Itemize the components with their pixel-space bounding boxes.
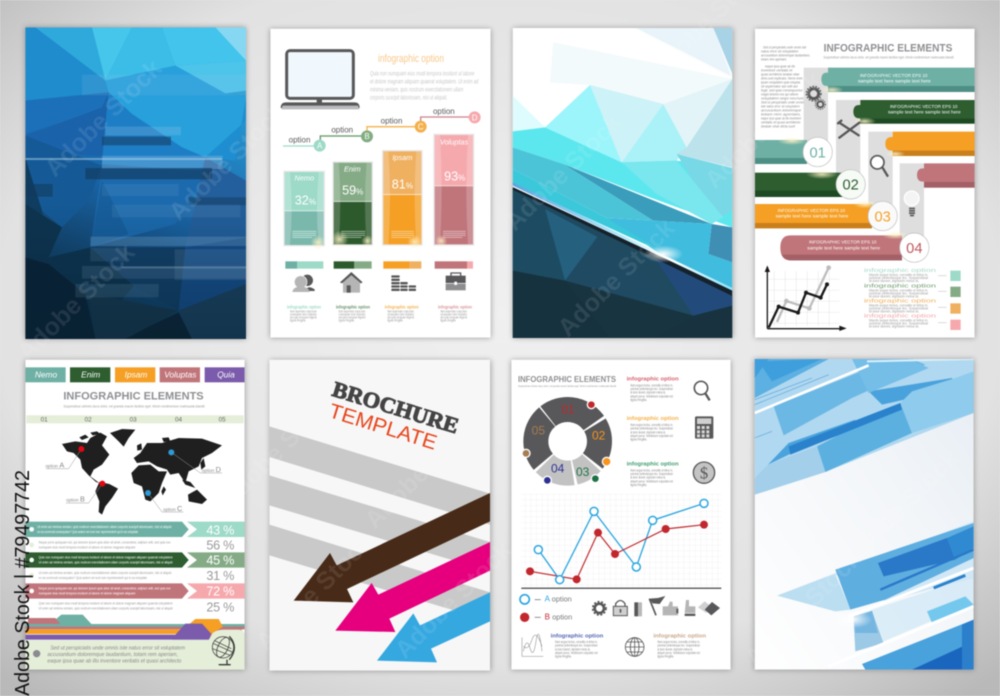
watermark: Adobe Stock: Adobe Stock: [359, 406, 487, 534]
row: 72%: [25, 583, 245, 599]
text block: blue option: ligula fringilla.: [555, 655, 572, 659]
text block: brown option: Nam augue lectus, convallis ut tellus in,: [657, 640, 700, 644]
watermark: Adobe Stock: Adobe Stock: [12, 238, 140, 366]
icon: people: [292, 275, 315, 292]
text block: option red: Nam augue lectus, convallis ut tellus in,: [630, 383, 673, 387]
timeline: options A to D: D: [472, 113, 478, 122]
icon: handshake: [698, 601, 720, 615]
timeline: options A to D: option: [433, 107, 455, 116]
text block: option captions: Nam aspernatur culpa iusto: [290, 310, 317, 314]
row: 31%: Ut enim ad minima veniam, quis nostrum exercitationem ullam corporis suscipit laboriosam, nisi ut aliquid: [39, 571, 171, 575]
coloured footer waves: [25, 615, 245, 641]
text block: left column: natus error sit voluptatem: [761, 50, 799, 54]
step badge 02: 02: [843, 178, 859, 194]
icon: padlock: [613, 600, 627, 616]
ribbon: teal top: sample text here sample text here: [858, 79, 931, 85]
ribbon: teal left: [755, 140, 807, 164]
option pins on map: option C: [163, 504, 183, 513]
bar: Nemo 32%: 32%: [295, 193, 316, 207]
text block: intro: et dolore magnam aliquam quaerat voluptatem. Ut enim ad: [370, 80, 479, 86]
text block: blue option: pulvinar pellentesque leo. Suspendisse: [555, 644, 598, 648]
text block: blue option: aliquet purus. Vestibulum vulputate est: [555, 651, 598, 655]
step badge 02: [836, 170, 865, 199]
footer text panel: [25, 630, 245, 670]
row: 31%: ex ea commodi consequatur? Quis autem vel eum iure reprehenderit qui in ea voluptate: [39, 576, 147, 580]
icon: laptop: [281, 51, 360, 109]
numbered band: 04: [175, 417, 183, 424]
text block: left column: Sed ut perspiciatis unde omnis: [761, 100, 805, 104]
bar: Voluptas 93%: 93%: [444, 170, 465, 184]
bar: Enim 59%: [331, 161, 373, 248]
option pins on map: option B: [66, 495, 85, 504]
row: 25%: 25 %: [206, 601, 234, 615]
text block: option captions: Nam aspernatur culpa iusto: [339, 310, 365, 314]
text block: option labels: infographic option: [336, 304, 370, 309]
bar: Nemo 32%: [283, 171, 325, 250]
option pins on map: option A: [45, 461, 64, 470]
text block: left column: accusantium doloremque laudantium,: [761, 54, 810, 58]
text block: option captions: ligula fringilla: [440, 319, 456, 323]
bar: Ipsam 81%: 81%: [392, 178, 413, 192]
text block: option captions: consequatur dolor explicabo: [339, 313, 365, 317]
ribbon: red left: [780, 235, 902, 260]
row: 31%: 31 %: [206, 569, 234, 583]
numbered band: 01: [41, 417, 48, 424]
step badge 01: [803, 137, 832, 167]
text block: intro: minima veniam, quis nostrum exercitationem ullam: [370, 88, 463, 94]
text block: option orange: Nam augue lectus, convallis ut tellus in,: [630, 423, 673, 427]
text block: option captions: sed quia numquam eligendi: [339, 316, 366, 320]
heading: infographic elements: INFOGRAPHIC ELEMENTS: [824, 42, 952, 54]
text block: option green: at dolor laoreet, dignissim metus at,: [630, 476, 666, 480]
text block: left column: totam rem aperiam,: [761, 58, 787, 62]
donut chart: 01: [561, 402, 575, 416]
text block: option captions: consequatur dolor explicabo: [440, 313, 467, 317]
donut chart: 04: [551, 461, 565, 475]
text block: option orange: aliquet purus. Vestibulum vulputate est: [630, 434, 673, 438]
text block: option captions: ligula fringilla: [387, 319, 403, 323]
step badge 01: 01: [810, 145, 826, 161]
panel: light blue geometric cover: [755, 359, 974, 670]
subtitle: Suspendisse ultricies lacus dolor, vel gravida mauris facilisis eget. Morbi condimentum malesuada blandit.: [518, 384, 617, 388]
ribbon glows: [777, 86, 909, 239]
legend: infographic options: pulvinar pellentesque leo. Suspendisse: [869, 276, 929, 280]
bar: Ipsam 81%: Ipsam: [392, 153, 412, 162]
text block: left column: totam rem aperiam,: [761, 112, 801, 116]
text block: option labels: [287, 304, 472, 309]
panel: dark blue polygon cover: [25, 27, 246, 339]
text block: option captions: sed quia numquam eligendi: [387, 316, 414, 320]
legend: infographic options: at dolor laoreet, dignissim metus at,: [869, 310, 919, 314]
text block: option orange: pulvinar pellentesque leo. Suspendisse: [630, 427, 673, 431]
text block: option green: ligula fringilla.: [630, 483, 647, 487]
row: 25%: Ut enim ad minima veniam, quis nostrum exercitationem ullam corporis suscipit laboriosam, nisi ut aliquid: [39, 607, 173, 611]
tabs row: Enim: [81, 370, 100, 380]
row: 72%: Neque porro quisquam est, qui dolorem ipsum quia dolor sit amet, consectetur, adipisci velit, sed quia non: [39, 587, 171, 591]
ribbon: orange left: INFOGRAPHIC VECTOR EPS 10: [778, 208, 846, 213]
row: 31%: [29, 569, 234, 583]
ribbon: orange left: sample text here sample text here: [776, 214, 849, 220]
text block: left column: Sed ut perspiciatis unde omnis iste: [763, 46, 807, 50]
text block: option labels: infographic option: [287, 304, 321, 309]
text block: option green: Nam augue lectus, convallis ut tellus in,: [630, 468, 673, 472]
text block: intro: corporis suscipit laboriosam, nisi ut aliquid.: [370, 96, 447, 102]
icon: card: [634, 602, 642, 616]
text block: left column: sit aspernatur aut odit aut: [761, 84, 798, 88]
text block: left column: magni dolores eos qui ratione: [761, 92, 799, 96]
grey connector strips: [804, 68, 924, 238]
text block: blue option: [551, 634, 604, 659]
row: 25%: Quis non numquam eius modi tempora incidunt ut labore et dolore magnam aliquam quaerat voluptatem: [39, 602, 173, 606]
donut chart: 02: [592, 429, 606, 443]
icon: magnifier: [871, 156, 888, 177]
stock id vertical text: Adobe Stock | #79497742: [12, 470, 34, 696]
bar: Voluptas 93%: Voluptas: [440, 138, 468, 147]
icon: light bulb: [904, 191, 919, 216]
text block: brown option: ligula fringilla.: [657, 655, 674, 659]
world map: [62, 429, 222, 515]
legend: infographic options: pulvinar pellentesque leo. Suspendisse: [869, 291, 929, 295]
bar: Ipsam 81%: [382, 150, 423, 249]
watermark: Adobe Stock: Adobe Stock: [39, 54, 167, 182]
icon: axe: [649, 596, 665, 615]
legend: infographic options: pulvinar pellentesque leo. Suspendisse: [869, 322, 929, 326]
legend: infographic options: at dolor laoreet, dignissim metus at,: [869, 279, 919, 283]
heading: infographic elements: INFOGRAPHIC ELEMENTS: [518, 374, 616, 384]
row: 56%: 56 %: [206, 539, 234, 553]
text block: left column: quasi architecto beatae vitae: [761, 72, 800, 76]
donut chart: 05: [532, 423, 545, 437]
legend: infographic options: Mauris augue lectus, convallis ut tellus in,: [869, 319, 928, 323]
grey stripes: [269, 426, 490, 618]
arrow: blue: [377, 592, 490, 662]
title: template: TEMPLATE: [326, 399, 440, 455]
watermark: Adobe Stock: Adobe Stock: [163, 98, 291, 226]
timeline: options A to D: B: [364, 132, 370, 141]
step badge 03: 03: [875, 209, 891, 225]
legend: infographic options: [864, 268, 961, 330]
text block: brown option: pulvinar pellentesque leo. Suspendisse: [657, 644, 700, 648]
icon: thumbs up: [663, 601, 678, 615]
step badge 04: 04: [906, 241, 922, 257]
icon: gears: [806, 86, 825, 109]
text block: left column: beatae vitae dicta sunt: [761, 124, 795, 128]
watermark: Adobe Stock: Adobe Stock: [214, 386, 342, 514]
icon: globe: [625, 638, 644, 656]
text block: left column: [761, 46, 810, 128]
line chart: [521, 494, 721, 589]
panel: brochure template with arrows: [269, 360, 490, 671]
watermark: Adobe Stock: Adobe Stock: [250, 528, 378, 656]
row: 56%: numquam eius modi tempora incidunt ut labore et dolore magnam aliquam: [39, 545, 136, 549]
chart legend: B option: [545, 612, 572, 621]
timeline: options A to D: option: [331, 126, 353, 135]
text block: option captions: [290, 310, 467, 323]
text block: option red: pulvinar pellentesque leo. Suspendisse: [630, 387, 673, 391]
row: 43%: 43 %: [206, 523, 234, 537]
text block: option captions: Nam aspernatur culpa iusto: [387, 310, 414, 314]
icon: gear: [593, 602, 606, 615]
timeline: options A to D: [283, 107, 481, 152]
text block: brown option: [653, 634, 707, 659]
legend: infographic options: infographic option: [864, 283, 936, 289]
donut chart: [522, 396, 613, 486]
tabs row: Ipsam: [125, 370, 147, 380]
subtitle: Suspendisse ultricies lacus dolor, vel gravida mauris facilisis eget. Morbi condimentum malesuada blandit.: [823, 56, 954, 60]
donut chart: 03: [576, 465, 590, 479]
legend: infographic options: at dolor laoreet, dignissim metus at,: [869, 325, 919, 329]
text block: left column: iste natus error sit voluptatem: [761, 104, 800, 108]
text block: left column: accusantium doloremque: [761, 108, 801, 112]
text block: option orange: infographic option: [627, 416, 679, 422]
ribbon: orange top: [885, 132, 975, 156]
icon: small chart: [522, 634, 543, 656]
ribbon: red left: INFOGRAPHIC VECTOR EPS 10: [809, 240, 877, 245]
legend: infographic options: pulvinar pellentesque leo. Suspendisse: [869, 307, 929, 311]
watermark: Adobe Stock: Adobe Stock: [836, 444, 964, 572]
text block: option captions: Nam aspernatur culpa iusto: [440, 310, 467, 314]
numbered band: 05: [219, 417, 226, 424]
row: 45%: 45 %: [206, 554, 234, 568]
legend: infographic options: Mauris augue lectus, convallis ut tellus in,: [869, 288, 928, 292]
text block: option green: [627, 461, 679, 487]
text block: left column: eaque ipsa quae ab illo: [765, 64, 795, 68]
timeline: options A to D: option: [289, 136, 310, 145]
text block: left column: voluptatem sequi nesciunt.: [761, 96, 804, 100]
ribbon: teal top: INFOGRAPHIC VECTOR EPS 10: [860, 73, 928, 78]
text block: footer: eaque ipsa quae ab illo inventore veritatis et quasi architecto: [47, 659, 181, 665]
icon: coin stacks: [391, 275, 416, 291]
bar: Nemo 32%: Nemo: [295, 174, 314, 183]
timeline: options A to D: option: [381, 116, 402, 125]
icon: dollar coin: [693, 462, 715, 483]
ribbon: red top: [917, 163, 975, 188]
numbered band: 03: [130, 417, 137, 424]
ribbon: green top: INFOGRAPHIC VECTOR EPS 10: [890, 104, 958, 109]
bar: Voluptas 93%: [433, 134, 474, 247]
panel: infographic ribbons page: [755, 29, 975, 338]
ribbon: teal top: [821, 68, 975, 92]
ribbon: green top: [853, 100, 975, 124]
panel: donut and line chart page: [511, 360, 731, 670]
panel: world map page: [25, 360, 245, 670]
ribbon: green left: [755, 173, 842, 197]
numbered band: [26, 415, 244, 424]
text block: left column: fugit, sed quia consequuntur: [761, 88, 804, 92]
numbered band: 02: [85, 417, 92, 424]
text block: option captions: sed quia numquam eligendi: [290, 316, 317, 320]
row: 25%: [29, 601, 234, 615]
ribbon: green top: sample text here sample text here: [888, 110, 961, 116]
text block: brown option: infographic option: [653, 634, 707, 640]
text block: left column: veritatis et quasi architecto: [761, 120, 801, 124]
text block: option green: infographic option: [627, 461, 679, 467]
text block: option captions: ligula fringilla: [290, 319, 306, 323]
arrow: magenta: [335, 542, 490, 632]
watermark: Adobe Stock: Adobe Stock: [499, 108, 627, 236]
text block: option red: aliquet purus. Vestibulum vulputate est: [630, 394, 673, 398]
title: brochure: BROCHURE: [330, 376, 462, 438]
text block: intro: [370, 72, 479, 102]
text block: footer: accusantium doloremque laudantium, totam rem aperiam,: [47, 652, 178, 658]
text block: option captions: consequatur dolor explicabo: [290, 313, 317, 317]
timeline: options A to D: C: [418, 123, 424, 132]
icon: briefcase: [446, 273, 466, 290]
bar: Enim 59%: 59%: [342, 184, 363, 198]
text block: left column: eaque ipsa quae ab illo inventore: [761, 116, 801, 120]
text block: option labels: infographic option: [438, 304, 472, 309]
text block: brown option: aliquet purus. Vestibulum vulputate est: [657, 651, 700, 655]
icon: pointing hand: [685, 600, 695, 616]
text block: option red: [627, 377, 679, 402]
heading: infographic option: infographic option: [378, 53, 444, 65]
ribbon: orange left: [755, 204, 872, 228]
text block: blue option: at dolor laoreet, dignissim metus at,: [555, 647, 590, 651]
text block: left column: ipsam voluptatem quia voluptas: [761, 80, 801, 84]
legend bars: [285, 261, 473, 269]
timeline: options A to D: A: [317, 141, 323, 150]
icon: house: [340, 272, 363, 293]
text block: left column: inventore veritatis et: [761, 68, 792, 72]
chart legend: A option: [545, 594, 572, 603]
option pins on map: option D: [202, 465, 221, 474]
text block: option captions: sed quia numquam eligendi: [440, 316, 467, 320]
text block: option orange: ligula fringilla.: [630, 438, 647, 442]
text block: option captions: consequatur dolor explicabo: [387, 313, 414, 317]
icon: dollar coin: $: [700, 464, 708, 483]
watermark: Adobe Stock: Adobe Stock: [699, 66, 827, 194]
heading: infographic elements: INFOGRAPHIC ELEMENTS: [63, 391, 204, 403]
row: 43%: [25, 522, 245, 537]
watermark: Adobe Stock: Adobe Stock: [739, 544, 867, 672]
step badge 03: [868, 201, 897, 231]
step badge 04: [900, 233, 929, 262]
legend: infographic options: Mauris augue lectus, convallis ut tellus in,: [869, 304, 928, 308]
icon: magnifier: [694, 381, 710, 400]
ribbon: red left: sample text here sample text here: [807, 245, 880, 251]
icon: globe: [212, 636, 234, 665]
row: 45%: [25, 552, 245, 568]
text block: option captions: ligula fringilla: [339, 319, 354, 323]
watermark: Adobe Stock: Adobe Stock: [389, 536, 517, 664]
row: 43%: Ut enim ad minima veniam, quis nostrum exercitationem ullam corporis suscipit laboriosam, nisi ut aliquid: [37, 525, 171, 529]
text block: option green: pulvinar pellentesque leo. Suspendisse: [630, 472, 673, 476]
panel: laptop infographic page: [270, 29, 491, 338]
text block: option red: at dolor laoreet, dignissim metus at,: [630, 391, 666, 395]
footer bullet: [33, 650, 40, 657]
row: 43%: ex ea commodi consequatur? Quis autem vel eum iure reprehenderit qui in ea voluptate: [37, 530, 138, 534]
row: 45%: Quis non numquam eius modi tempora incidunt ut labore et dolore magnam aliquam quaerat voluptatem: [39, 556, 173, 560]
row: 56%: [29, 539, 234, 553]
subtitle: Suspendisse ultricies lacus dolor, vel gravida mauris facilisis eget. Morbi condimentum malesuada blandit.: [63, 405, 205, 409]
row: 56%: Neque porro quisquam est, qui dolorem ipsum quia dolor sit amet, consectetur, adipisci velit, sed quia non: [39, 540, 171, 544]
text block: blue option: infographic option: [551, 634, 604, 640]
text block: footer: Sed ut perspiciatis unde omnis iste natus error sit voluptatem: [50, 645, 186, 651]
text block: blue option: Nam augue lectus, convallis ut tellus in,: [555, 640, 598, 644]
tabs row: Voluptas: [164, 370, 196, 380]
text block: intro: Quia non numquam eius modi tempora incidunt ut labore: [370, 72, 475, 78]
legend: infographic options: at dolor laoreet, dignissim metus at,: [869, 294, 919, 298]
panel: cyan polygon cover: [513, 28, 732, 338]
text block: option orange: at dolor laoreet, dignissim metus at,: [630, 430, 666, 434]
text block: left column: dicta sunt explicabo. Nemo enim: [761, 76, 803, 80]
tabs row: [25, 367, 245, 382]
row: 72%: numquam eius modi tempora incidunt ut labore et dolore magnam aliquam: [39, 592, 136, 596]
text block: option green: aliquet purus. Vestibulum vulputate est: [630, 479, 673, 483]
text block: option orange: [627, 416, 679, 442]
text block: footer: [47, 645, 186, 665]
legend: infographic options: infographic option: [864, 268, 936, 274]
legend: infographic options: Mauris augue lectus, convallis ut tellus in,: [869, 273, 928, 277]
chart legend: [520, 594, 572, 622]
line chart: [765, 265, 847, 331]
icon: calculator: [695, 416, 713, 439]
text block: brown option: at dolor laoreet, dignissim metus at,: [657, 647, 693, 651]
icon: wrench and screwdriver: [838, 121, 859, 138]
legend: infographic options: infographic option: [864, 299, 936, 305]
row: 72%: 72 %: [206, 584, 234, 598]
row: 45%: Ut enim ad minima veniam, quis nostrum exercitationem ullam corporis suscipit laboriosam, nisi ut aliquid: [39, 561, 173, 565]
bar: Enim 59%: Enim: [344, 164, 361, 173]
legend: infographic options: infographic option: [864, 314, 936, 320]
watermark: Adobe Stock: Adobe Stock: [552, 214, 680, 342]
option pins on map: [45, 446, 222, 513]
text block: option red: infographic option: [627, 377, 679, 383]
text block: option labels: infographic option: [385, 304, 419, 309]
arrow: brown: [294, 493, 490, 602]
tabs row: Quia: [217, 370, 235, 380]
tabs row: Nemo: [35, 370, 57, 380]
text block: option red: ligula fringilla.: [630, 398, 647, 402]
